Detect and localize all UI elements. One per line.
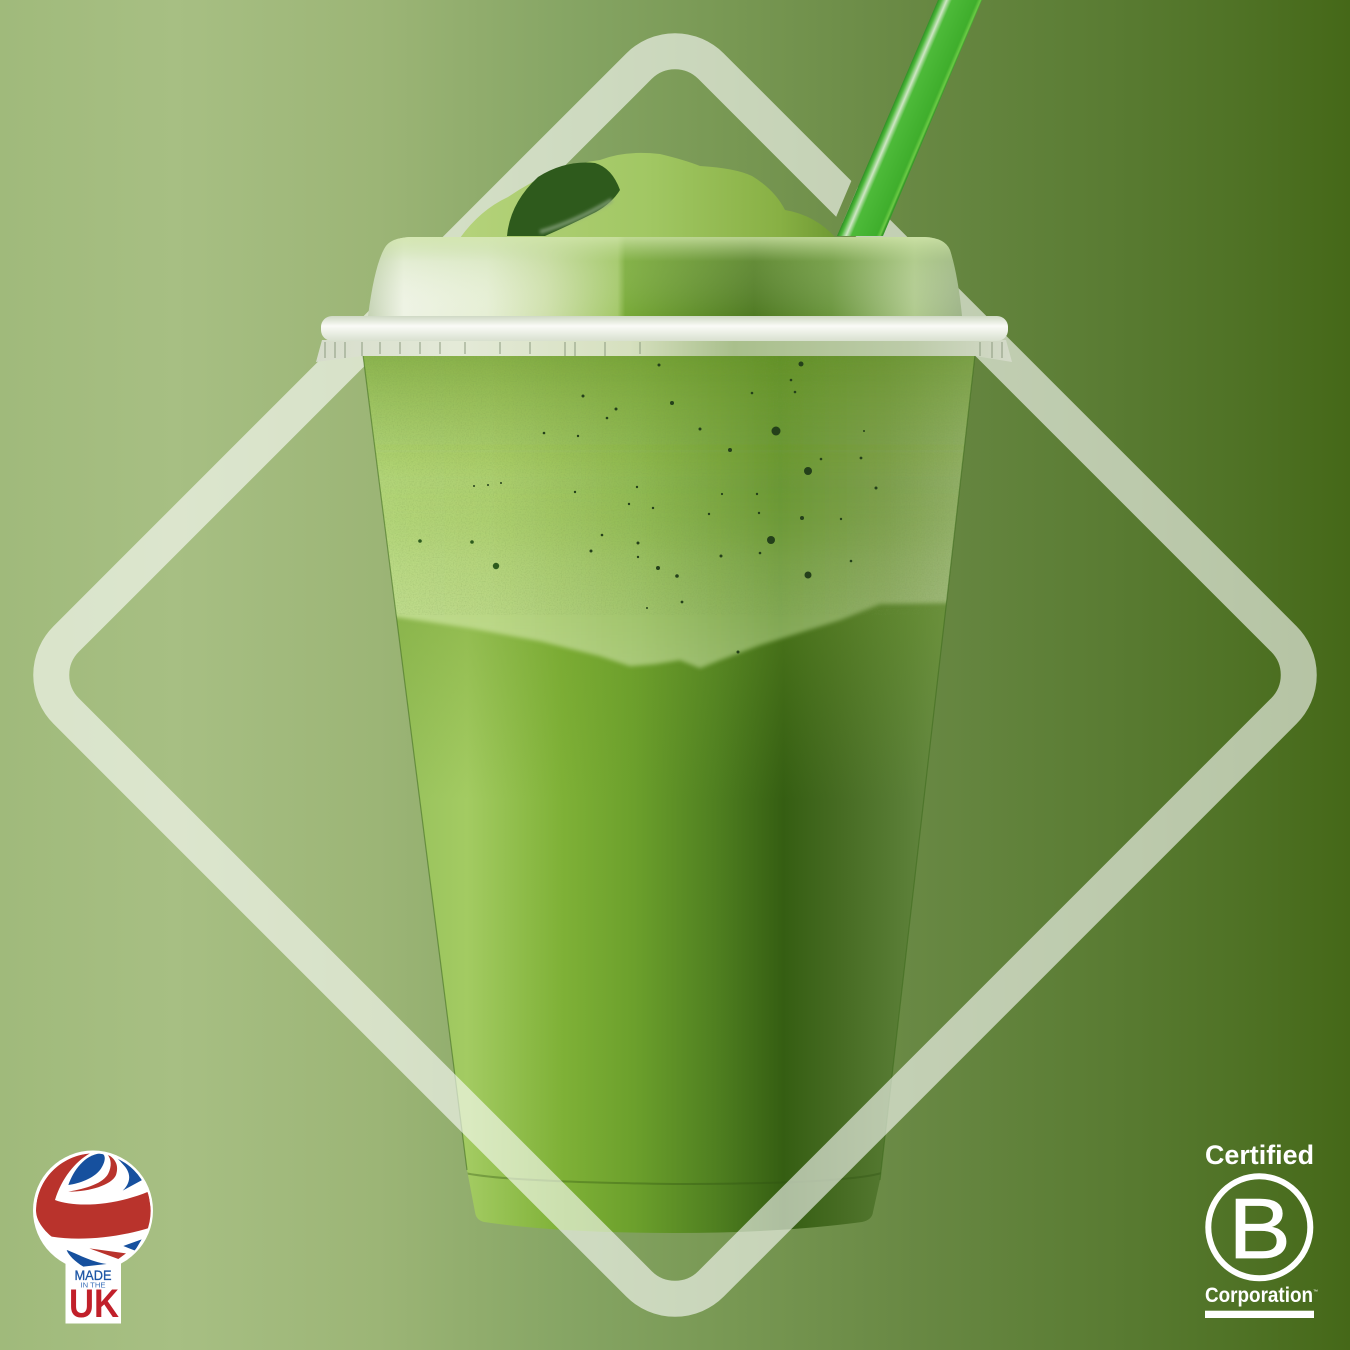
foam layer xyxy=(360,350,980,668)
B letter: B xyxy=(1228,1181,1291,1276)
underline bar xyxy=(1205,1311,1314,1318)
badge text: UK: UK xyxy=(69,1282,119,1326)
badge backing xyxy=(33,1150,153,1324)
icon: leaf xyxy=(507,163,620,236)
foam top with leaf xyxy=(460,153,836,238)
foam speckles xyxy=(418,362,878,654)
diamond frame: lower half over cup xyxy=(33,675,1317,1317)
trademark mark: ™ xyxy=(1313,1289,1318,1295)
straw xyxy=(837,0,982,236)
badge: certified B corporation xyxy=(1205,1140,1318,1318)
lid upper rim xyxy=(321,316,1008,341)
cup body xyxy=(360,350,980,1235)
lid xyxy=(316,237,1012,362)
badge text: IN THE: IN THE xyxy=(80,1282,106,1290)
B logo ring xyxy=(1208,1176,1310,1278)
label: Certified: Certified xyxy=(1205,1140,1314,1170)
diamond frame: upper half behind cup xyxy=(33,33,1317,675)
cup outline edges xyxy=(363,355,975,1180)
lid lower rim xyxy=(316,340,1012,362)
badge text: MADE: MADE xyxy=(74,1267,112,1283)
label: Corporation: Corporation xyxy=(1205,1284,1313,1307)
icon: union flag globe xyxy=(36,1153,153,1267)
badge: made in the UK xyxy=(33,1150,153,1326)
gap beside straw xyxy=(828,170,865,236)
cup xyxy=(316,237,1012,1235)
